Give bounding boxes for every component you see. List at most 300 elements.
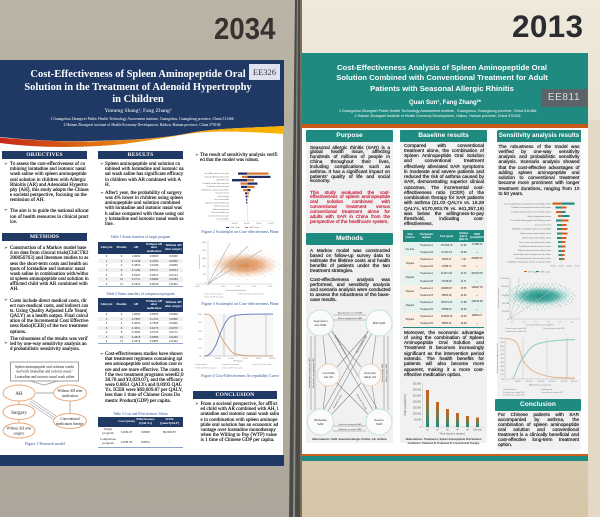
table 1: 0.0054 xyxy=(169,268,178,272)
methods text: QALY) as a health output. Final calcul xyxy=(10,313,88,319)
acceptability curve: right poster: 0 xyxy=(506,381,507,383)
purpose highlighted text: effectiveness of spleen aminopeptide xyxy=(310,195,390,200)
table 1: 4 xyxy=(121,263,122,267)
table 1 xyxy=(98,235,183,287)
tornado chart: left poster: Cost of isotonic nasal wash xyxy=(209,214,229,217)
baseline text: effectiveness. xyxy=(404,222,433,227)
conclusion text: e in combination with spleen aminope xyxy=(200,417,277,423)
baseline results table: 155710.00 xyxy=(441,301,452,304)
results text: mbined with loratadine and isotonic na xyxy=(105,166,184,172)
baseline text: outcomes. The incremental cost- xyxy=(404,186,484,191)
ICER bar chart: 300,000 xyxy=(413,390,422,392)
conclusion text: vantage over loratadine monotherapy xyxy=(200,427,276,433)
objectives text: ➢ xyxy=(4,208,8,213)
acceptability curve: right poster: 2 times the per capita GDP xyxy=(541,391,563,394)
ICER bar chart: 150,000 xyxy=(413,408,422,410)
table 2: 4 xyxy=(106,330,107,334)
heading: baseline results: Baseline results xyxy=(418,132,469,139)
baseline results table: Lifetime QALYs (QALYs) xyxy=(459,232,468,240)
scatter plot: right poster: ¥400,000 xyxy=(502,303,509,305)
table 2: 0.3651 xyxy=(132,326,140,330)
baseline results table: 72604.47 xyxy=(442,258,451,261)
tornado chart: right poster: Probability of asymptomatic transfer to mild asthma xyxy=(511,206,551,209)
table 2: 6 xyxy=(106,339,107,343)
research model diagram: Without AH after xyxy=(6,426,32,430)
tornado chart: left poster: Probability of relief after nasal rinse xyxy=(203,182,229,185)
scatter plot: left poster: 2 times of GDP per capita xyxy=(204,296,223,298)
purpose text: asthma. It has a significant impact on xyxy=(310,170,390,175)
methods text: to assess the robustness of the base- xyxy=(310,293,390,298)
heading: sensitivity analysis xyxy=(497,130,581,142)
conclusion text: treatment is a clinically beneficial and xyxy=(498,433,579,438)
conclusion text: ➢ xyxy=(195,402,199,407)
sensitivity text: ➢ xyxy=(195,153,199,158)
baseline results table: 96660.27 xyxy=(472,314,482,317)
sensitivity text: analysis and probabilistic sensitivity xyxy=(498,155,580,160)
methods text: ation of the Incremental Cost Effective xyxy=(10,318,89,324)
purpose highlighted text: perspective of the healthcare system. xyxy=(310,220,389,225)
baseline results table: 15.35 xyxy=(460,287,466,290)
baseline results table: Treatment A xyxy=(420,272,433,275)
markov state diagram: Severe to mild SAR xyxy=(381,363,384,382)
table 3: 0.8851 xyxy=(141,440,150,444)
table 3: 69,609.87 xyxy=(163,430,176,434)
baseline text: Spleen Aminopeptide Oral Solution xyxy=(404,154,484,159)
baseline results table xyxy=(403,230,484,328)
methods text: A Markov model was constructed xyxy=(310,248,390,254)
baseline results table: 200079.35 xyxy=(471,272,483,275)
tornado chart: right poster: 70,000 xyxy=(574,266,580,268)
markov state diagram: Mild to severe SAR xyxy=(385,364,388,382)
cost-effectiveness text: een aminopeptide oral solution cost m xyxy=(105,361,182,367)
conclusion text: when the Willing to Pay (WTP) value xyxy=(200,432,277,438)
table 3: Table 3 Cost and Effectiveness Values xyxy=(113,412,168,416)
table 2: 4 xyxy=(121,321,122,325)
cost-effectiveness text: less than 1 time of Chinese Gross Do xyxy=(105,392,180,398)
tornado chart: right poster: Health utility value of asymptomatic with asthma xyxy=(514,253,551,256)
baseline results table: 146097.35 xyxy=(471,286,483,289)
table 2: 5 xyxy=(106,335,107,339)
acceptability curve: left poster: 40,000 xyxy=(228,358,234,360)
acceptability curve: right poster: 200,000 xyxy=(549,381,555,383)
tornado chart: left poster: Cost of AH treatment in one cycle xyxy=(204,172,229,175)
table 3: Target program xyxy=(102,427,114,435)
baseline results table: 7.26 xyxy=(461,265,466,268)
acceptability curve: right poster: 20% xyxy=(500,370,504,372)
right poster margin xyxy=(588,120,600,517)
conclusion text: option. xyxy=(498,443,512,448)
left poster footer band xyxy=(0,455,284,466)
cost-effectiveness text: ➢ xyxy=(100,352,104,357)
baseline results table: — xyxy=(476,294,478,297)
heading: objectives: OBJECTIVES xyxy=(26,152,63,158)
table 2: 1 xyxy=(106,317,107,321)
purpose text: economy. xyxy=(310,179,330,184)
acceptability curve: left poster: 2 times of GDP per capita xyxy=(195,366,216,370)
markov state diagram: Asymptomatic to moderate SAR xyxy=(308,358,311,388)
tornado chart: right poster: Cost of Spleen Aminopeptide Oral Solution per piece xyxy=(510,219,551,222)
markov state diagram: Severe xyxy=(374,418,384,422)
baseline text: reduced the risk of asthma caused by xyxy=(404,175,484,180)
baseline results table: 30years xyxy=(406,290,414,293)
acceptability curve: right poster: Treatment group xyxy=(503,388,516,391)
cost-effectiveness text xyxy=(100,351,184,404)
tornado chart: right poster: Cost of severe accompanied with asthma xyxy=(519,241,551,244)
sensitivity text: analysis. Scenario analysis showed xyxy=(498,160,580,165)
scatter plot: left poster: 2,000 xyxy=(202,242,206,244)
ICER bar chart: 0 xyxy=(420,427,422,429)
purpose text: global health issue, affecting xyxy=(310,150,390,155)
baseline results table: ICER (yuan/QALY) xyxy=(470,233,484,239)
acceptability curve: right poster: 80% xyxy=(500,346,504,348)
research model diagram: ned with loratadine and isotonic nasal / xyxy=(16,370,73,374)
baseline results table: 50years xyxy=(406,318,414,321)
table 2: 0.6279 xyxy=(150,326,158,330)
table 2: Table 2 Status transfers of comparison program xyxy=(106,292,175,296)
conclusion text: For Chinese patients with SAR xyxy=(498,412,579,418)
baseline results table: 37559.54 xyxy=(442,308,451,311)
research model diagram: medication therapy xyxy=(56,422,84,426)
table 2: 0.2674 xyxy=(132,339,140,343)
acceptability curve: right poster: 90% xyxy=(500,342,504,344)
acceptability curve: right poster: 50,000 xyxy=(515,381,521,383)
sensitivity text: became more prominent with longer xyxy=(498,181,580,186)
acceptability curve: left poster: 100% xyxy=(197,314,202,316)
baseline results table: 17.68 xyxy=(460,301,466,304)
research model diagram: AH xyxy=(15,392,23,397)
ICER bar chart: 50,000 xyxy=(414,420,422,422)
scatter plot: left poster: 1,000 xyxy=(202,258,206,260)
tornado chart: left poster: Probability of surgery among children xyxy=(201,188,229,191)
poster title xyxy=(24,69,252,105)
methods text: performed, and sensitivity analysis xyxy=(310,283,390,288)
acceptability curve: left poster: Target program xyxy=(195,363,208,366)
methods text: d probabilistic sensitivity analysis. xyxy=(10,346,80,352)
conclusion text: ptide oral solution has an economic ad xyxy=(200,422,278,428)
ICER bar chart: 100,000 xyxy=(413,414,422,416)
table 2: Without AH after medication xyxy=(146,299,162,310)
acceptability curve: right poster: 0% xyxy=(501,379,504,381)
sensitivity text: verified by one-way sensitivity xyxy=(498,150,580,155)
sensitivity text xyxy=(498,144,580,197)
tornado chart: left poster: ICER: Upper xyxy=(230,227,241,229)
baseline results table: 11.71 xyxy=(461,280,466,283)
acceptability curve: left poster: Comparison program xyxy=(222,364,239,366)
baseline text xyxy=(404,143,484,227)
baseline results table: Treatment A xyxy=(420,301,433,304)
abstract code badge xyxy=(541,89,587,107)
methods text xyxy=(4,245,89,352)
methods text: treatment strategies. xyxy=(310,268,353,274)
scatter plot: right poster: ¥200,000 xyxy=(502,311,509,313)
right poster edge line xyxy=(300,0,302,517)
ICER bar chart: 30 xyxy=(446,430,449,432)
baseline results table: 20years xyxy=(406,276,414,279)
authors: Yumeng Shang¹, Fang Zhang² xyxy=(104,108,172,114)
scatter plot: left poster: -0.050 xyxy=(194,286,200,288)
baseline results table: 39852.36 xyxy=(442,322,451,325)
purpose highlighted text: This study evaluated the cost- xyxy=(310,190,390,196)
acceptability curve: right poster: 10% xyxy=(500,374,504,376)
table 2: 0.0000 xyxy=(169,321,178,325)
markov state diagram: Severe to mild SAR xyxy=(356,393,368,411)
caption: figure 3: Figure 3 Scatterplot on Cost-effectiveness Plane xyxy=(201,301,279,306)
table 1: 2 xyxy=(121,259,122,263)
table 2: 0.0070 xyxy=(169,326,178,330)
baseline text: and conventional treatment xyxy=(404,159,484,164)
table 1: Lifecycle xyxy=(101,245,112,249)
baseline results table: Treatment A xyxy=(420,315,433,318)
baseline text: effectively alleviated SAR symptoms xyxy=(404,165,484,170)
methods text: estimate the lifetime costs and health xyxy=(310,258,390,264)
affiliations xyxy=(339,108,537,118)
acceptability curve: left poster: 20% xyxy=(198,348,202,350)
tornado chart: right poster: Utility of asymptomatic asthma xyxy=(527,215,551,218)
baseline results table: — xyxy=(476,265,478,268)
moreover text: effective medication option. xyxy=(404,373,461,378)
markov state diagram: Moderate to severe SAR xyxy=(339,428,362,431)
baseline results table: 19.28 xyxy=(460,251,466,254)
baseline results table: — xyxy=(476,322,478,325)
scatter plot: right poster: 3.0 xyxy=(571,322,573,324)
tornado chart: left poster: 75,000 xyxy=(268,223,274,225)
baseline results table: Treatment B xyxy=(420,251,433,254)
scatter plot: left poster: Incremental costs xyxy=(198,255,201,269)
sensitivity text: that the cost-effective advantages of xyxy=(498,166,580,170)
table 1: 0.3820 xyxy=(132,263,140,267)
cost-effectiveness text: Cost-effectiveness studies have shown xyxy=(105,351,183,357)
heading: conclusion xyxy=(495,399,581,411)
purpose text: Seasonal allergic rhinitis (SAR) is a xyxy=(310,146,390,150)
table 2: 0.0172 xyxy=(169,330,178,334)
authors: Quan Sun¹, Fang Zhang²* xyxy=(409,100,481,106)
methods text: Costs include direct medical costs, dir xyxy=(10,298,87,304)
purpose highlighted text: oral solution combined with xyxy=(310,200,390,205)
poster title: Cost-Effectiveness of Spleen Aminopeptide Oral xyxy=(30,69,246,80)
scatter plot: left poster: 0.050 xyxy=(221,286,225,288)
markov state diagram: atic SAR xyxy=(315,323,327,327)
ICER bar chart: 50 xyxy=(466,430,469,432)
table 2: 6 xyxy=(121,326,122,330)
year label 2034: 2034 xyxy=(214,11,276,46)
conclusion text: cost-effective long-term treatment xyxy=(498,438,579,443)
table 2: Lifecycle xyxy=(101,302,112,306)
markov state diagram: ble AS xyxy=(324,375,333,379)
methods text: 200056763) and literature studies to as xyxy=(10,255,88,261)
ICER bar chart: 40 xyxy=(456,430,459,432)
purpose text xyxy=(310,145,390,184)
markov state diagram: Mild SAR xyxy=(373,321,386,325)
sensitivity text: adding spleen aminopeptide oral xyxy=(498,171,580,176)
table 2: 0.0000 xyxy=(169,317,178,321)
abstract code badge: EE811 xyxy=(548,92,580,103)
sensitivity text: to 50 years. xyxy=(498,192,523,197)
table 1: 12 xyxy=(120,282,123,286)
acceptability curve: right poster: Willingness to pay (yuan) xyxy=(529,384,552,386)
baseline text: in moderate and severe patients and xyxy=(404,170,484,175)
acceptability curve: right poster: 100% xyxy=(499,338,504,340)
table 1: 5 xyxy=(106,277,107,281)
table 1: 0.6989 xyxy=(150,277,158,281)
baseline results table: Treatment B xyxy=(420,322,433,325)
tornado chart: right poster: Probability of controllable asthma to uncontrollable xyxy=(512,228,551,230)
caption: treatment abbreviations xyxy=(406,438,482,444)
heading: purpose xyxy=(306,130,393,142)
results text: h saline compared with those using onl xyxy=(105,211,184,217)
baseline results table: — xyxy=(476,251,478,254)
baseline results table: Treatment A xyxy=(420,244,433,247)
sensitivity text: The robustness of the model was xyxy=(498,144,580,150)
tornado chart: right poster: Discount rate of cost xyxy=(535,224,552,226)
scatter plot: right poster: 1.0 xyxy=(523,322,525,324)
baseline text: SAR, demonstrating superior clinical xyxy=(404,180,484,185)
table 3 xyxy=(98,412,183,448)
acceptability curve: right poster: 250,000 xyxy=(561,381,567,383)
scatter plot: left poster: 800 xyxy=(203,266,206,268)
acceptability curve: left poster: WTP(yuan) xyxy=(233,360,243,362)
table 2: 0.6886 xyxy=(150,335,158,339)
baseline results table: 139695.87 xyxy=(441,287,452,290)
methods text: ts. Using Quality Adjusted Life Years( xyxy=(10,308,87,314)
table 1: 1.0000 xyxy=(132,254,140,258)
acceptability curve: right poster: Control group xyxy=(541,388,552,391)
baseline results table: 40years xyxy=(406,304,414,307)
table 1: 0.0000 xyxy=(169,254,178,258)
tornado chart: right poster: Probability of asymptomatic transfer to moderate asthma xyxy=(507,260,551,264)
cost-effectiveness text: were 0.8851 QALYs and 0.8993 QAL xyxy=(105,382,182,388)
tornado chart: left poster: Probability of relief with spray xyxy=(207,185,229,188)
affiliations: 1 Guangzhou Zhongwei Public Health Technology Assessment institute, Guangzhou, Guangdong province, China 511466 xyxy=(50,116,234,120)
heading: conclusion: CONCLUSION xyxy=(216,392,254,398)
results text: sal wash saline has significant efficacy xyxy=(105,171,183,177)
right poster wall background xyxy=(300,0,600,517)
objectives text: e societal perspective, focusing on the xyxy=(10,192,87,198)
acceptability curve: left poster: 0 xyxy=(204,358,205,360)
tornado chart: right poster: 50,000 xyxy=(558,266,564,268)
scatter plot: right poster: ¥0 xyxy=(507,319,509,321)
objectives text xyxy=(4,161,89,225)
table 1: Months xyxy=(116,245,127,249)
methods text: ied by one-way sensitivity analysis an xyxy=(10,341,87,347)
table 1: 0.2903 xyxy=(132,273,140,277)
acceptability curve: right poster: Probability of cost-effectiveness (%) xyxy=(496,343,499,373)
scatter plot: left poster: 1 time of GDP per capita xyxy=(204,292,223,296)
tornado chart: right poster: Utility of moderate seasonal allergic rhinitis xyxy=(518,249,551,252)
table 1: 10 xyxy=(120,277,123,281)
table 1: 0.0144 xyxy=(169,273,178,277)
methods text: The robustness of the results was verif xyxy=(10,336,88,342)
markov state diagram: Asymptomatic to severe xyxy=(334,334,348,356)
heading: objectives xyxy=(2,151,87,159)
baseline results table: Time horizon xyxy=(406,233,414,239)
sensitivity text: solution to conventional treatment xyxy=(498,176,580,181)
table 1: Without AH after surgery xyxy=(165,243,182,251)
acceptability curve: left poster: 80% xyxy=(198,322,202,324)
objectives text: ➢ xyxy=(4,162,8,167)
methods text: afflicted child with AR combined with xyxy=(10,281,88,287)
table 2: 0.0296 xyxy=(169,335,178,339)
table 3: 2,038.76 xyxy=(121,440,132,444)
acceptability curve: left poster: 20,000 xyxy=(215,358,221,360)
tornado chart: right poster: 60,000 xyxy=(566,266,572,268)
heading: results xyxy=(98,151,183,159)
table 1: 0.0000 xyxy=(150,254,158,258)
abstract code badge xyxy=(249,64,280,80)
scatter plot: left poster: Incremental effectiveness xyxy=(226,289,246,292)
table 1: 0.4762 xyxy=(150,259,158,263)
purpose text: hundreds of millions of people in xyxy=(310,155,390,160)
table 1: 0 xyxy=(121,254,122,258)
baseline text: effectiveness ratio (ICER) of the xyxy=(404,191,484,196)
acceptability curve: left poster: 60,000 xyxy=(242,358,248,360)
baseline text: QALYs, ¥170,903.76 vs. ¥41,357.19) xyxy=(404,207,484,212)
conclusion text: ed child with AR combined with AH, l xyxy=(200,406,278,412)
baseline results table: Treatment A xyxy=(420,287,433,290)
heading: conclusion: Conclusion xyxy=(520,401,556,408)
ICER bar chart: ICER (yuan/QALY) xyxy=(403,394,407,416)
table 2: 0.6885 xyxy=(150,339,158,343)
baseline results table: 41 357.19 xyxy=(441,251,452,254)
table 2: 12 xyxy=(120,339,123,343)
table 1: 0.6953 xyxy=(150,273,158,277)
moreover text xyxy=(404,330,484,378)
right poster header banner xyxy=(302,53,588,128)
tornado chart: left poster: Utility after AH relief with surgery xyxy=(205,175,229,178)
left poster wall background xyxy=(0,0,300,517)
table 1: 0.6946 xyxy=(150,282,158,286)
baseline results table: Life time xyxy=(405,248,415,251)
markov state diagram: Uncontro xyxy=(364,371,376,375)
methods text: ➢ xyxy=(4,246,8,251)
markov state diagram: Asymptom xyxy=(313,319,328,323)
acceptability curve: right poster: 50% xyxy=(500,358,504,360)
moreover text: Aminopeptide Oral Solution and xyxy=(404,341,484,346)
baseline results table: Treatment B xyxy=(420,308,433,311)
table 1: 0.5238 xyxy=(132,259,140,263)
scatter plot: left poster: 0.200 xyxy=(268,286,272,288)
markov state diagram: Mild to asymptomatic SAR xyxy=(338,317,363,320)
heading: sensitivity analysis: Sensitivity analysis results xyxy=(499,132,579,139)
tornado chart: left poster: Cost of loratadine xyxy=(216,218,229,220)
results text: with loratadine and isotonic nasal was xyxy=(105,205,182,211)
tornado chart: right poster: ICER: Upper xyxy=(528,272,539,274)
acceptability curve: left poster: 80,000 xyxy=(256,358,262,360)
sensitivity text xyxy=(195,152,278,163)
poster title xyxy=(336,62,548,92)
tornado chart: right poster: 40,000 xyxy=(550,266,556,268)
purpose highlighted text: conventional treatment alone for xyxy=(310,210,390,215)
markov state diagram: Asymptomatic to mild SAR xyxy=(338,312,363,314)
baseline text: was below the willingness-to-pay xyxy=(404,212,484,217)
baseline results table: Treatment B xyxy=(420,294,433,297)
affiliations: 2 Hainan Zhongwei institute of Health Economy Development, Haikou, Hainan province, China 570106 xyxy=(64,122,220,126)
caption: figure 4: Figure 4 Cost-Effectiveness Acceptability Curve xyxy=(201,373,279,378)
methods text: case results. xyxy=(310,298,337,303)
scatter plot: right poster: Incremental cost (yuan) xyxy=(497,288,500,308)
methods text: benefits of patients under the two xyxy=(310,264,390,268)
scatter plot: right poster: 0.5 xyxy=(511,322,513,324)
tornado chart: left poster: Cost of oral solution xyxy=(214,198,229,201)
affiliations: 2 Hainan Zhongwei Institute of Health Economy Development, Haikou, Hainan province, China 570106. xyxy=(355,114,521,118)
acceptability curve: right poster: 30% xyxy=(500,366,504,368)
tornado chart: right poster: Utility of mild seasonal allergic rhinitis xyxy=(522,236,551,240)
scatter plot: right poster: ¥600,000 xyxy=(502,295,509,297)
baseline results table: Cost (yuan) xyxy=(440,234,453,238)
methods text: based on follow-up survey data to xyxy=(310,254,390,258)
panel: left column background xyxy=(306,130,393,443)
markov state diagram: SAR xyxy=(376,422,383,426)
table 3: Effectiveness (QALYs) xyxy=(136,417,155,425)
